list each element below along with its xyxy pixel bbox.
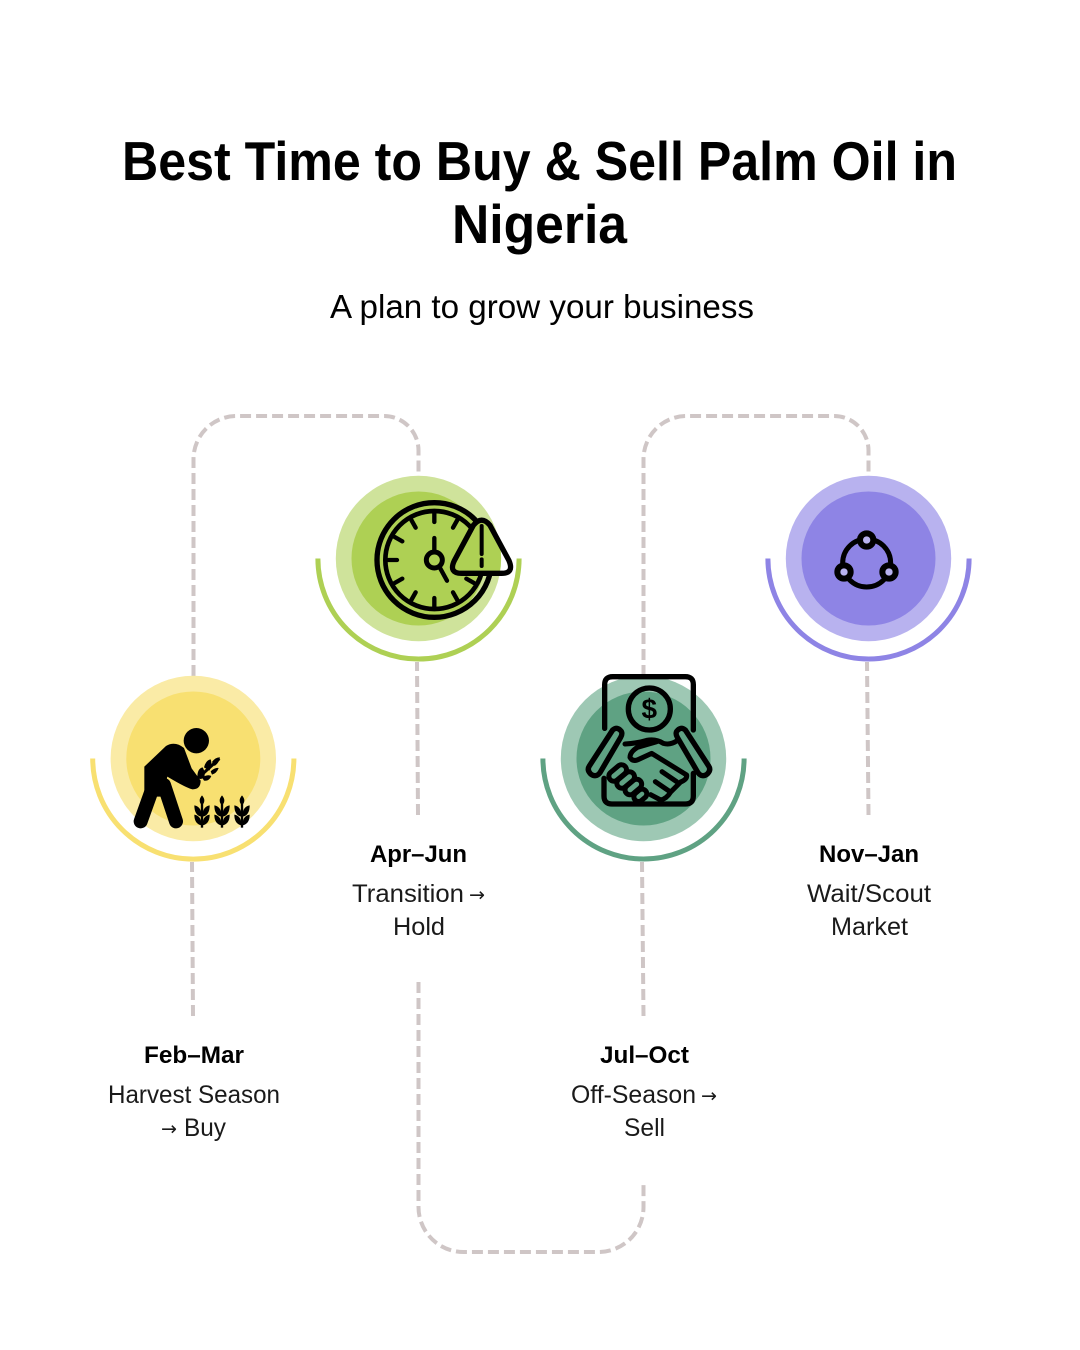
teal circle badge	[543, 676, 744, 859]
purple circle badge	[768, 476, 969, 659]
subtitle: A plan to grow your business	[330, 288, 754, 325]
label: Jul–Oct: Sell	[624, 1114, 665, 1142]
label: Jul–Oct: Jul–Oct	[600, 1042, 689, 1069]
label: Jul–Oct: →	[701, 1085, 717, 1107]
label: Jul–Oct	[571, 1042, 717, 1142]
label: Apr–Jun	[352, 841, 485, 941]
title: Best Time to Buy & Sell Palm Oil in	[122, 130, 957, 192]
label: Feb–Mar: Feb–Mar	[144, 1042, 244, 1069]
label: Nov–Jan: Market	[831, 913, 908, 941]
icon: three connected nodes	[837, 533, 896, 587]
label: Apr–Jun: Apr–Jun	[370, 841, 467, 868]
yellow circle badge	[93, 676, 294, 859]
icon: handshake over banknote	[588, 677, 710, 804]
icon: handshake over banknote: $	[642, 694, 658, 725]
label: Apr–Jun: Transition	[352, 880, 464, 908]
label: Apr–Jun: Hold	[393, 913, 445, 941]
label: Apr–Jun: →	[469, 884, 485, 906]
label: Feb–Mar: Buy	[184, 1114, 226, 1142]
step 1: Feb–Mar	[93, 676, 294, 1142]
title	[122, 130, 957, 255]
title: Nigeria	[452, 193, 627, 255]
label: Jul–Oct: Off-Season	[571, 1081, 696, 1109]
step 4: Nov–Jan	[768, 476, 969, 941]
label: Nov–Jan	[807, 841, 931, 941]
label: Feb–Mar	[108, 1042, 280, 1142]
icon: clock with warning triangle	[377, 503, 511, 617]
label: Feb–Mar: →	[161, 1118, 177, 1140]
label: Feb–Mar: Harvest Season	[108, 1081, 280, 1109]
label: Nov–Jan: Wait/Scout	[807, 880, 931, 908]
icon: farmer tending crops	[141, 728, 250, 828]
step 2: Apr–Jun	[318, 476, 519, 941]
green circle badge	[318, 476, 519, 659]
dashed connector path	[192, 416, 868, 1252]
label: Nov–Jan: Nov–Jan	[819, 841, 919, 868]
step 3: Jul–Oct	[543, 676, 744, 1142]
